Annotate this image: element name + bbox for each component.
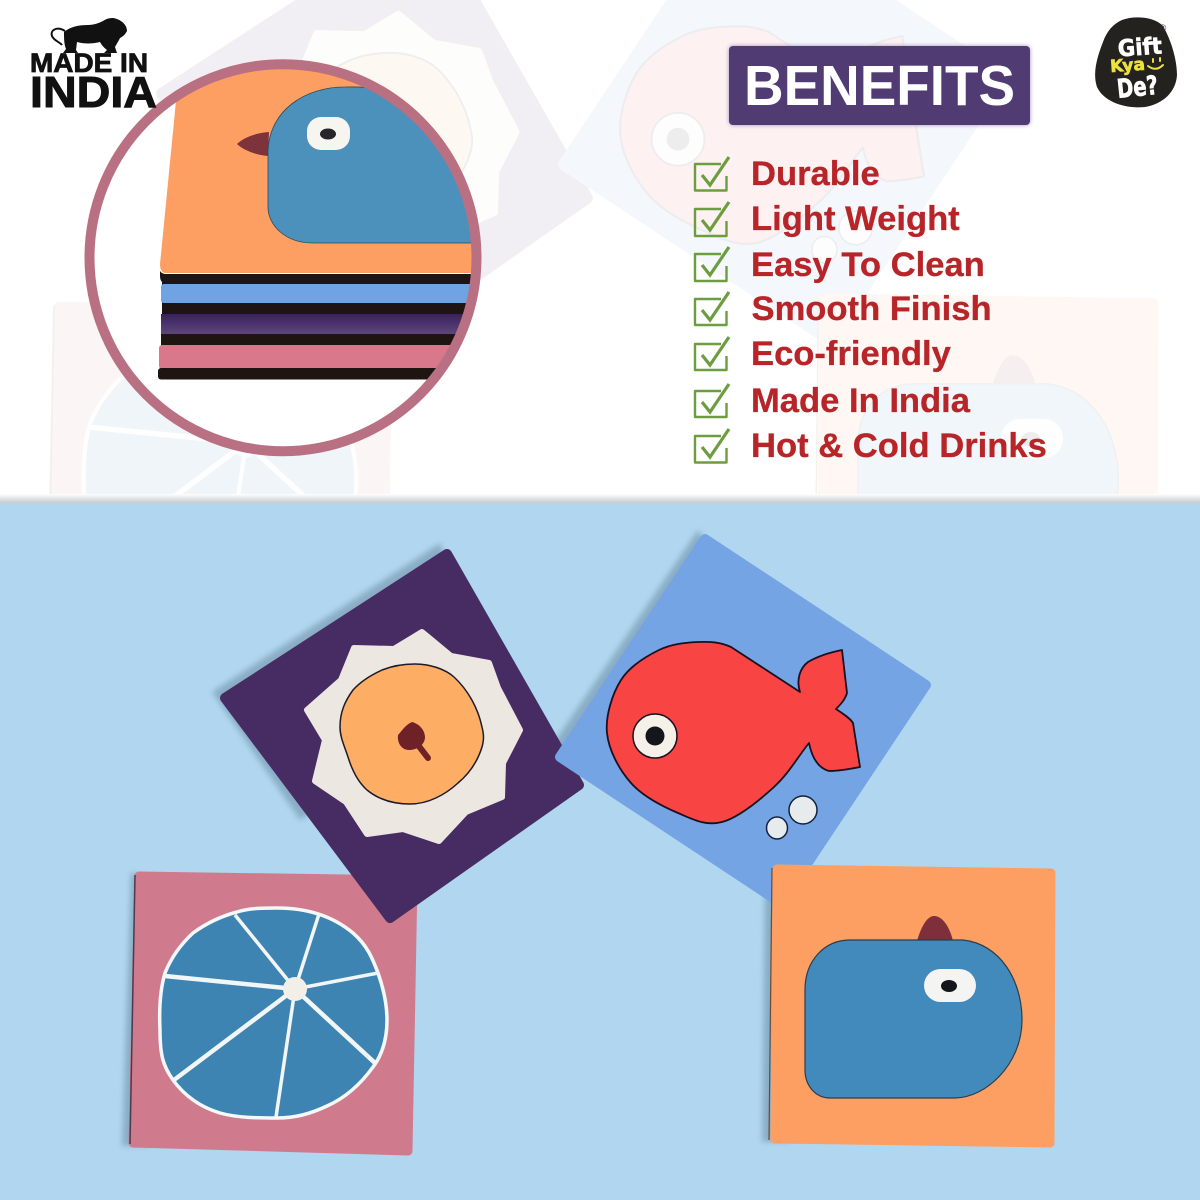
- smile icon: [1148, 58, 1163, 69]
- blue lower panel: [0, 503, 1200, 1200]
- gift kya de logo: De?: [1116, 71, 1159, 105]
- coasters: [130, 539, 1051, 1151]
- red fish: [607, 642, 860, 823]
- gift kya de logo: [1095, 17, 1177, 107]
- benefits heading: BENEFITS: [744, 54, 1015, 118]
- item: easy to clean: Easy To Clean: [751, 246, 985, 284]
- benefits list: [695, 155, 1047, 465]
- ghost background of coasters: [50, 0, 1158, 494]
- item: light weight: Light Weight: [751, 200, 960, 238]
- fish eye: [633, 714, 677, 758]
- whale body: [805, 940, 1022, 1098]
- item: smooth finish: Smooth Finish: [752, 290, 992, 328]
- made in india logo: [30, 18, 157, 117]
- item: eco-friendly: Eco-friendly: [751, 335, 952, 373]
- coaster: pink with blue wheel: [130, 875, 413, 1151]
- gift kya de logo: Gift: [1117, 34, 1163, 63]
- coaster: orange with whale: [769, 868, 1051, 1143]
- stack of layers: [158, 282, 481, 380]
- keyhole mark: [398, 722, 428, 758]
- flower: [307, 632, 520, 841]
- gift kya de logo: Kya: [1109, 55, 1146, 77]
- wheel shape: [160, 908, 387, 1118]
- bird beak: [237, 132, 269, 156]
- gift kya de logo: ®: [1160, 23, 1167, 33]
- orange top coaster: [160, 69, 472, 282]
- zoom circle: stacked coasters: [89, 40, 501, 452]
- india text: INDIA: [30, 68, 157, 117]
- coaster: purple with flower: [225, 554, 579, 918]
- bird body: [268, 86, 471, 244]
- fin: [917, 916, 953, 941]
- lion icon: [52, 18, 127, 53]
- bubbles: [766, 796, 817, 839]
- made in text: MADE IN: [30, 48, 148, 78]
- item: made in india: Made In India: [751, 382, 971, 420]
- orange centre: [340, 664, 484, 804]
- section divider shadow: [0, 494, 1200, 504]
- item: durable: [695, 155, 880, 193]
- coaster shadows: [122, 530, 790, 1146]
- whale eye: [924, 969, 976, 1002]
- item: hot and cold drinks: Hot & Cold Drinks: [751, 427, 1047, 465]
- item: durable: Durable: [751, 155, 880, 193]
- bird eye: [307, 117, 350, 150]
- coaster: blue with red fish: [560, 539, 926, 903]
